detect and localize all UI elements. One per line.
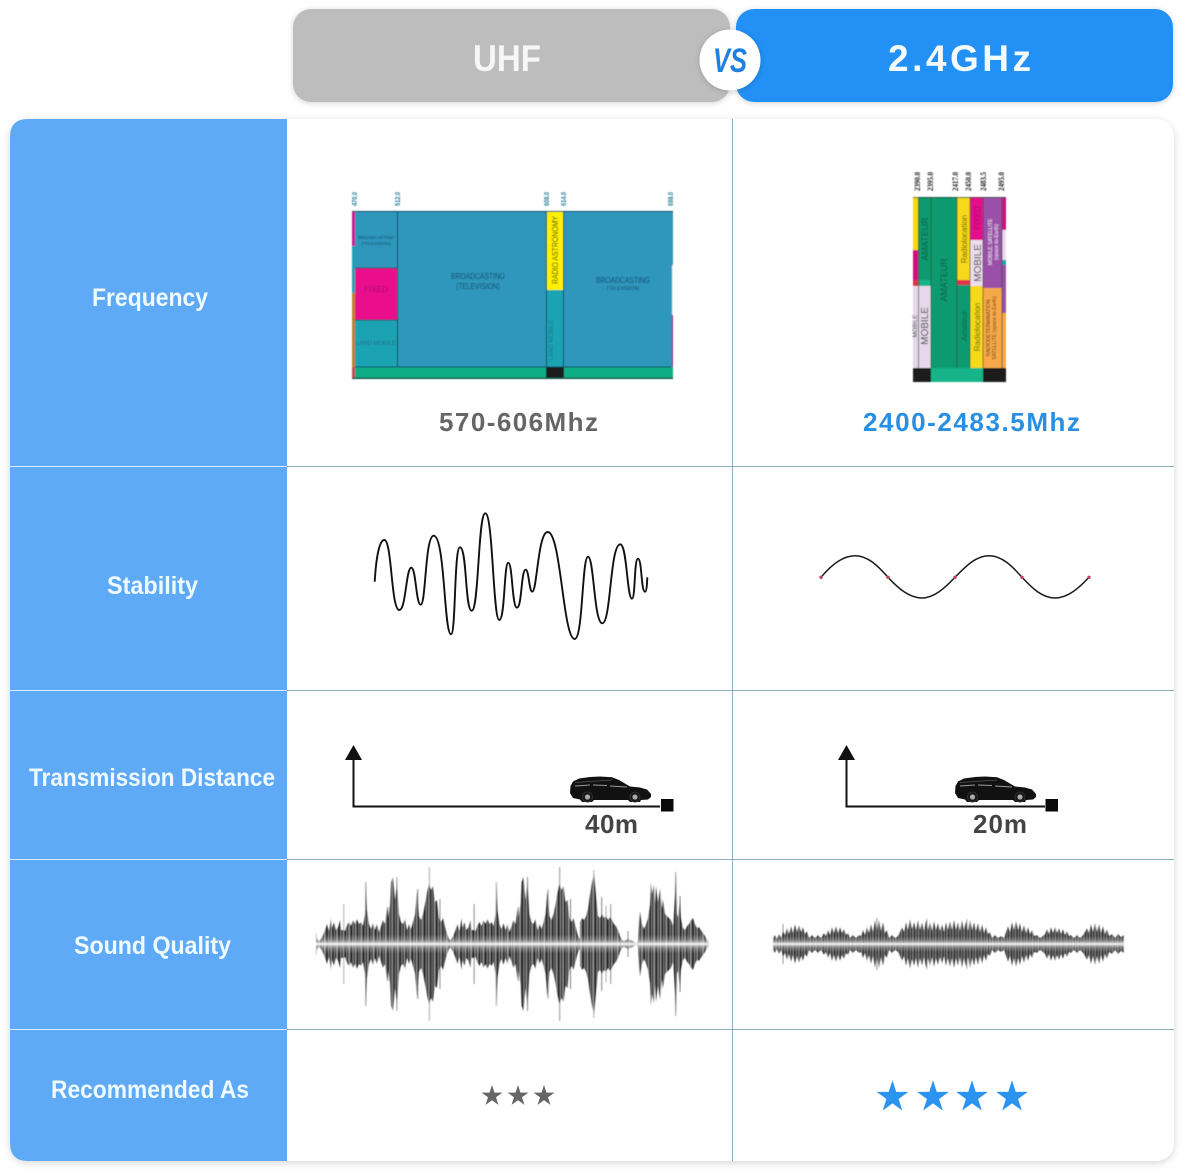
band labels: SATELLITE (space-to-Earth) xyxy=(992,296,998,360)
frequency ticks xyxy=(913,172,1006,191)
chart: UHF audio waveform xyxy=(316,867,711,1021)
icon: car xyxy=(955,776,1036,802)
caption: 2400-2483.5Mhz: 2400-2483.5Mhz xyxy=(863,407,1080,437)
frequency ticks: 2395.0 xyxy=(926,172,935,191)
label: Frequency: Frequency xyxy=(92,284,208,312)
band labels: Amateur xyxy=(960,311,969,341)
band labels: LAND MOBILE xyxy=(549,320,555,360)
header: UHF xyxy=(293,9,730,102)
label: Stability: Stability xyxy=(107,572,198,600)
rating: UHF three stars xyxy=(482,1085,554,1105)
header: UHF: UHF xyxy=(473,38,541,79)
frequency ticks: 2495.0 xyxy=(997,172,1006,191)
frequency ticks: 2390.0 xyxy=(913,172,922,191)
band labels: MOBILE xyxy=(913,315,919,337)
band labels: MOBILE SATELLITE xyxy=(988,218,994,265)
band labels: RADIO ASTRONOMY xyxy=(551,215,560,284)
frequency ticks: 470.0 xyxy=(352,192,359,206)
distance value: 40m xyxy=(585,809,638,839)
chart: 2.4GHz audio waveform xyxy=(773,918,1124,970)
label: Transmission Distance: Transmission Distance xyxy=(29,764,275,792)
label: Recommended As: Recommended As xyxy=(51,1076,249,1104)
icon: car xyxy=(570,776,651,802)
band labels xyxy=(913,206,1000,360)
frequency ticks: 2417.0 xyxy=(951,172,960,191)
chart: 2.4GHz frequency allocation xyxy=(913,172,1006,382)
frequency ticks: 614.0 xyxy=(561,192,568,206)
band labels: (TELEVISION) xyxy=(361,241,391,246)
band labels: (TELEVISION) xyxy=(607,286,640,292)
band labels: Radiolocation xyxy=(973,303,982,351)
rating: 2.4GHz four stars xyxy=(877,1080,1028,1111)
chart: UHF unstable wave xyxy=(375,513,647,639)
band labels: FIXED xyxy=(364,285,388,294)
chart: UHF distance 40m xyxy=(345,745,674,839)
band labels: FIXED xyxy=(973,206,982,230)
chart: 2.4GHz distance 20m xyxy=(838,745,1058,839)
band labels: Radiolocation xyxy=(960,215,969,263)
frequency ticks: 608.0 xyxy=(544,192,551,206)
band labels: AMATEUR xyxy=(920,217,930,261)
band labels: AMATEUR xyxy=(939,258,949,302)
band labels: RADIODETERMINATION xyxy=(986,299,992,356)
frequency ticks: 512.0 xyxy=(395,192,402,206)
frequency ticks: 698.0 xyxy=(668,192,675,206)
VS badge xyxy=(700,30,760,90)
label: Sound Quality: Sound Quality xyxy=(74,932,231,960)
header: 2.4GHz: 2.4GHz xyxy=(888,38,1031,79)
band labels: MOBILE xyxy=(920,307,931,345)
band labels xyxy=(356,215,650,360)
band labels: MOBILE xyxy=(973,244,984,282)
header: 2.4GHz xyxy=(736,9,1173,102)
band labels: (TELEVISION) xyxy=(456,281,500,291)
left label column xyxy=(10,119,287,1161)
frequency ticks: 2450.0 xyxy=(964,172,973,191)
band labels: BROADCASTING xyxy=(596,275,650,285)
frequency ticks xyxy=(352,192,675,206)
chart: 2.4GHz stable wave xyxy=(819,556,1091,598)
frequency ticks: 2483.5 xyxy=(979,172,988,191)
VS badge: VS xyxy=(713,42,747,80)
band labels: BROADCASTING xyxy=(358,235,394,240)
distance value: 20m xyxy=(973,809,1027,839)
band labels: (space-to-Earth) xyxy=(994,224,1000,260)
caption: 570-606Mhz: 570-606Mhz xyxy=(439,407,598,437)
chart: UHF frequency allocation xyxy=(352,192,675,379)
band labels: LAND MOBILE xyxy=(356,341,396,347)
band labels: BROADCASTING xyxy=(451,271,505,281)
